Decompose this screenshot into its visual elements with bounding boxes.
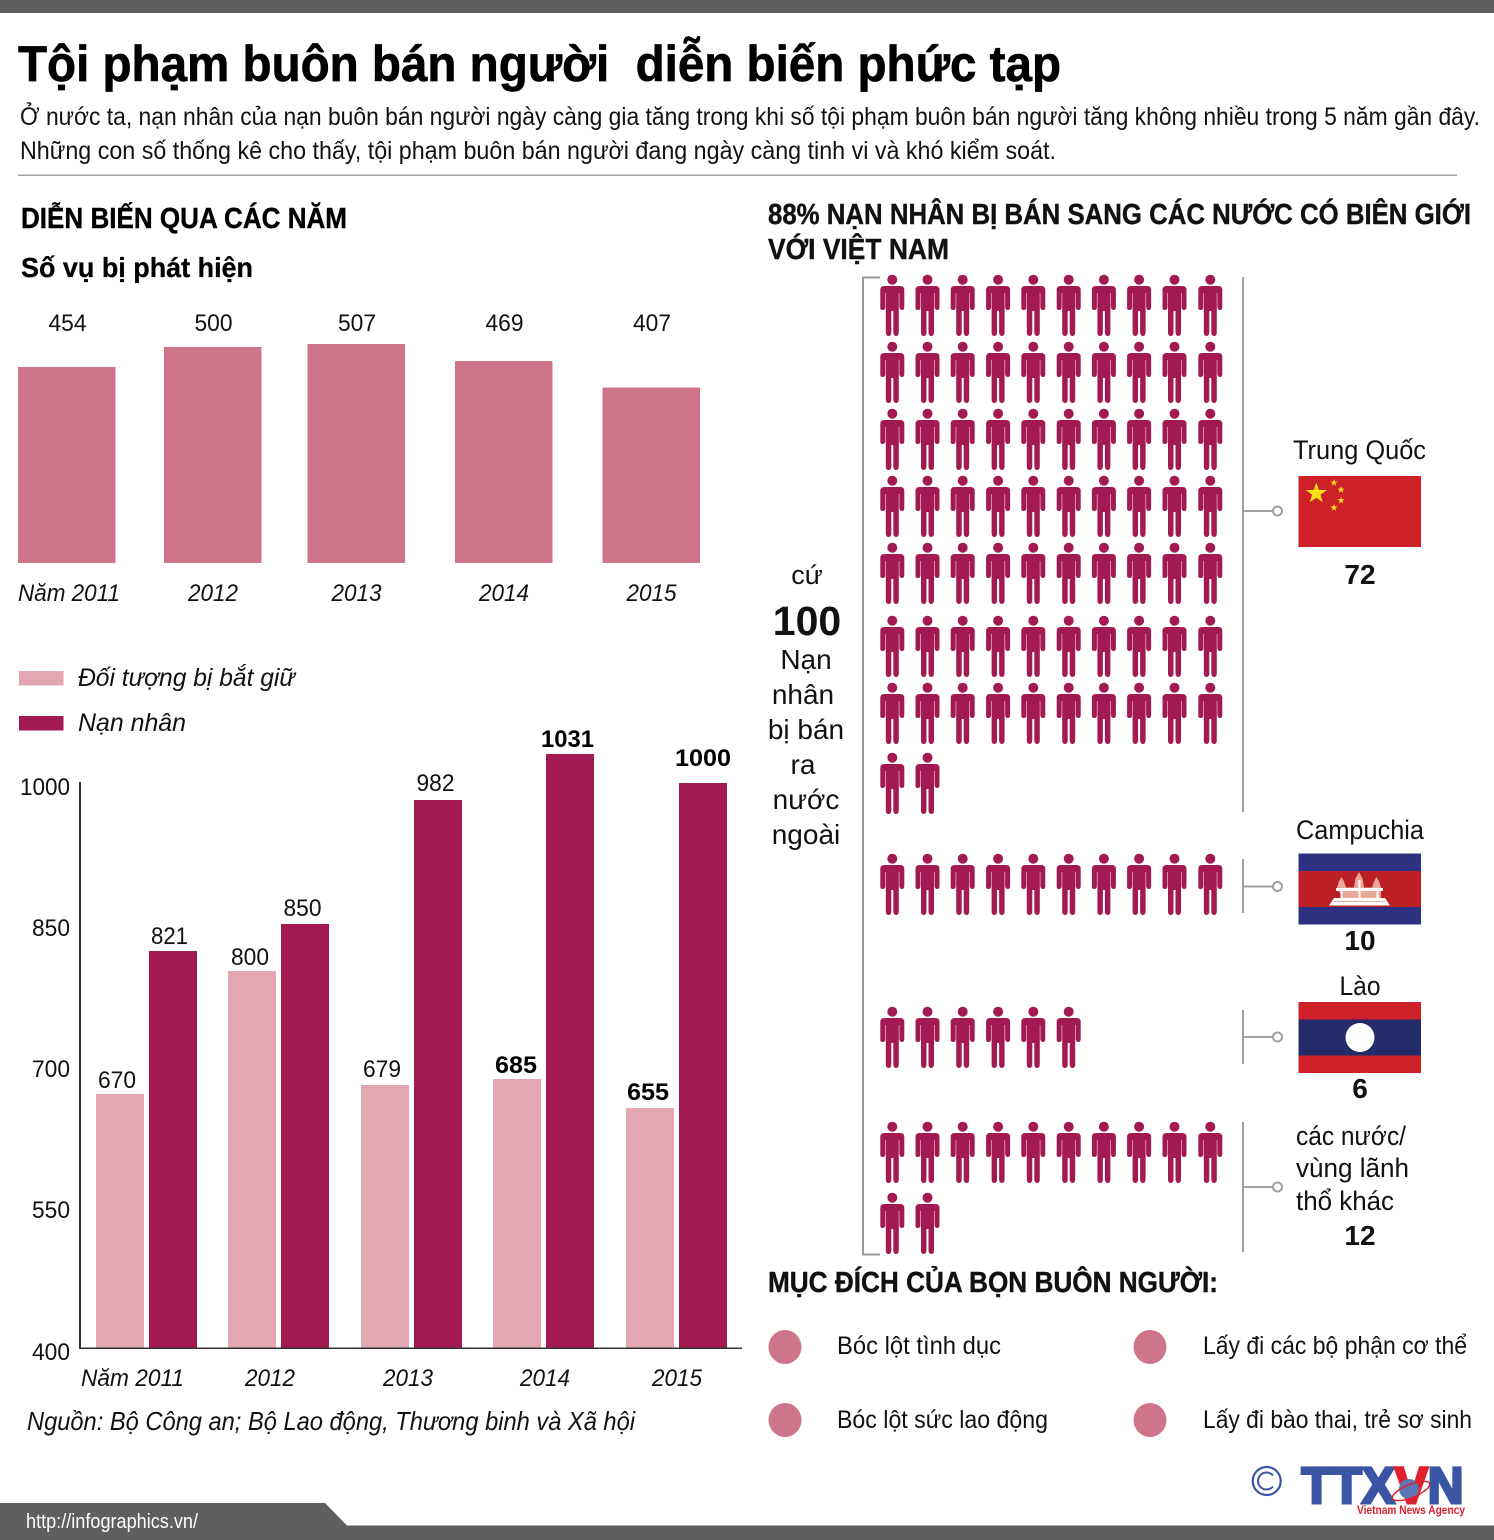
bar chart: detected cases: 469: [486, 310, 524, 337]
connector: China: [1243, 277, 1282, 812]
source note: Nguồn: Bộ Công an; Bộ Lao động, Thương binh và Xã hội: [27, 1406, 636, 1436]
heading: trends: DIỄN BIẾN QUA CÁC NĂM: [21, 201, 347, 235]
label: per 100 victims: Nạn: [780, 644, 832, 675]
label: per 100 victims: [768, 560, 844, 850]
purposes list: Lấy đi các bộ phận cơ thể: [1203, 1332, 1467, 1360]
label: per 100 victims: cứ: [791, 560, 823, 590]
label: other territories: [1296, 1121, 1409, 1216]
bar chart: detected cases: 454: [48, 310, 86, 337]
label: other territories: các nước/: [1296, 1121, 1406, 1151]
label: per 100 victims: bị bán: [768, 714, 844, 745]
intro text: Những con số thống kê cho thấy, tội phạm buôn bán người đang ngày càng tinh vi và khó kiểm soát.: [20, 137, 1056, 165]
bar chart: arrested and victims: 679: [363, 1056, 401, 1083]
bar chart: arrested and victims: 1031: [541, 726, 594, 753]
copyright mark: [1253, 1467, 1281, 1495]
legend: Đối tượng bị bắt giữ: [78, 663, 297, 692]
bar chart: arrested and victims: 1000: [20, 774, 70, 801]
label: other territories: vùng lãnh: [1296, 1153, 1409, 1183]
bar chart: detected cases: 2012: [187, 580, 238, 607]
bar chart: arrested and victims: 2014: [519, 1365, 570, 1392]
intro text: [20, 101, 1480, 165]
bar chart: detected cases: 407: [633, 310, 671, 337]
bar chart: arrested and victims: 821: [151, 923, 188, 950]
purposes list: Bóc lột tình dục: [837, 1332, 1001, 1360]
bar chart: arrested and victims: 400: [32, 1339, 70, 1366]
bar chart: arrested and victims: 700: [32, 1056, 70, 1083]
value: other territories: 12: [1344, 1220, 1376, 1251]
footer band: [0, 1503, 1494, 1540]
bar chart: arrested and victims: 1000: [675, 745, 731, 772]
title: Tội phạm buôn bán người diễn biến phức tạp: [18, 36, 1061, 92]
logo: TTXVN: Vietnam News Agency: [1357, 1505, 1466, 1517]
pictogram: Cambodia 10: [880, 854, 1222, 915]
purposes list: Bóc lột sức lao động: [837, 1406, 1048, 1434]
bar chart: detected cases: 507: [338, 310, 376, 337]
value: Cambodia: 10: [1344, 925, 1376, 956]
bar chart: arrested and victims: Năm 2011: [81, 1365, 184, 1392]
label: per 100 victims: ngoài: [772, 819, 840, 850]
subheading: detected cases: Số vụ bị phát hiện: [21, 252, 253, 283]
flag: Cambodia: [1298, 854, 1421, 924]
heading: 88 percent: VỚI VIỆT NAM: [768, 232, 949, 266]
value: Laos: 6: [1352, 1073, 1368, 1104]
flag: Laos: [1298, 1002, 1421, 1073]
purposes list: Lấy đi bào thai, trẻ sơ sinh: [1203, 1406, 1472, 1434]
value: China: 72: [1344, 559, 1376, 590]
bar chart: arrested and victims: 2013: [382, 1365, 434, 1392]
bar chart: detected cases: 500: [194, 310, 232, 337]
logo: TTXVN: TTXVN: [1302, 1457, 1464, 1514]
bar chart: arrested and victims: 982: [416, 770, 454, 797]
bar chart: arrested and victims: 850: [32, 915, 70, 942]
label: other territories: thổ khác: [1296, 1186, 1394, 1216]
legend: [19, 663, 297, 737]
pictogram: China 72: [880, 275, 1222, 814]
label: China: Trung Quốc: [1293, 435, 1426, 465]
pictogram: other territories 12: [880, 1122, 1222, 1254]
label: Cambodia: Campuchia: [1296, 815, 1425, 845]
connector: Laos: [1243, 1010, 1282, 1064]
bar chart: arrested and victims: 2012: [244, 1365, 295, 1392]
label: per 100 victims: 100: [773, 598, 841, 644]
bar chart: arrested and victims: 670: [98, 1067, 136, 1094]
footer url: http://infographics.vn/: [26, 1511, 198, 1533]
legend: Nạn nhân: [78, 709, 186, 737]
bar chart: detected cases: [18, 310, 700, 607]
label: per 100 victims: ra: [791, 749, 816, 780]
bar chart: arrested and victims: 550: [32, 1197, 70, 1224]
connector: other territories: [1243, 1122, 1282, 1252]
bar chart: detected cases: 2015: [626, 580, 677, 607]
heading: 88 percent: [768, 197, 1471, 266]
purposes list: [768, 1330, 1472, 1437]
connector: Cambodia: [1243, 859, 1282, 913]
label: Laos: Lào: [1340, 971, 1380, 1001]
bracket: [863, 278, 880, 1254]
bar chart: arrested and victims: 800: [231, 944, 269, 971]
heading: purposes: MỤC ĐÍCH CỦA BỌN BUÔN NGƯỜI:: [768, 1265, 1218, 1299]
bar chart: detected cases: 2013: [331, 580, 382, 607]
bar chart: detected cases: Năm 2011: [18, 580, 120, 607]
pictogram: Laos 6: [880, 1007, 1081, 1068]
bar chart: arrested and victims: 685: [495, 1052, 537, 1079]
label: per 100 victims: nước: [773, 784, 839, 815]
bar chart: arrested and victims: [20, 726, 742, 1392]
label: per 100 victims: nhân: [772, 679, 834, 710]
bar chart: detected cases: 2014: [478, 580, 529, 607]
bar chart: arrested and victims: 850: [284, 895, 322, 922]
bar chart: arrested and victims: 2015: [651, 1365, 703, 1392]
flag: China: [1298, 476, 1421, 547]
top band: [0, 0, 1494, 13]
bar chart: arrested and victims: 655: [627, 1079, 669, 1106]
